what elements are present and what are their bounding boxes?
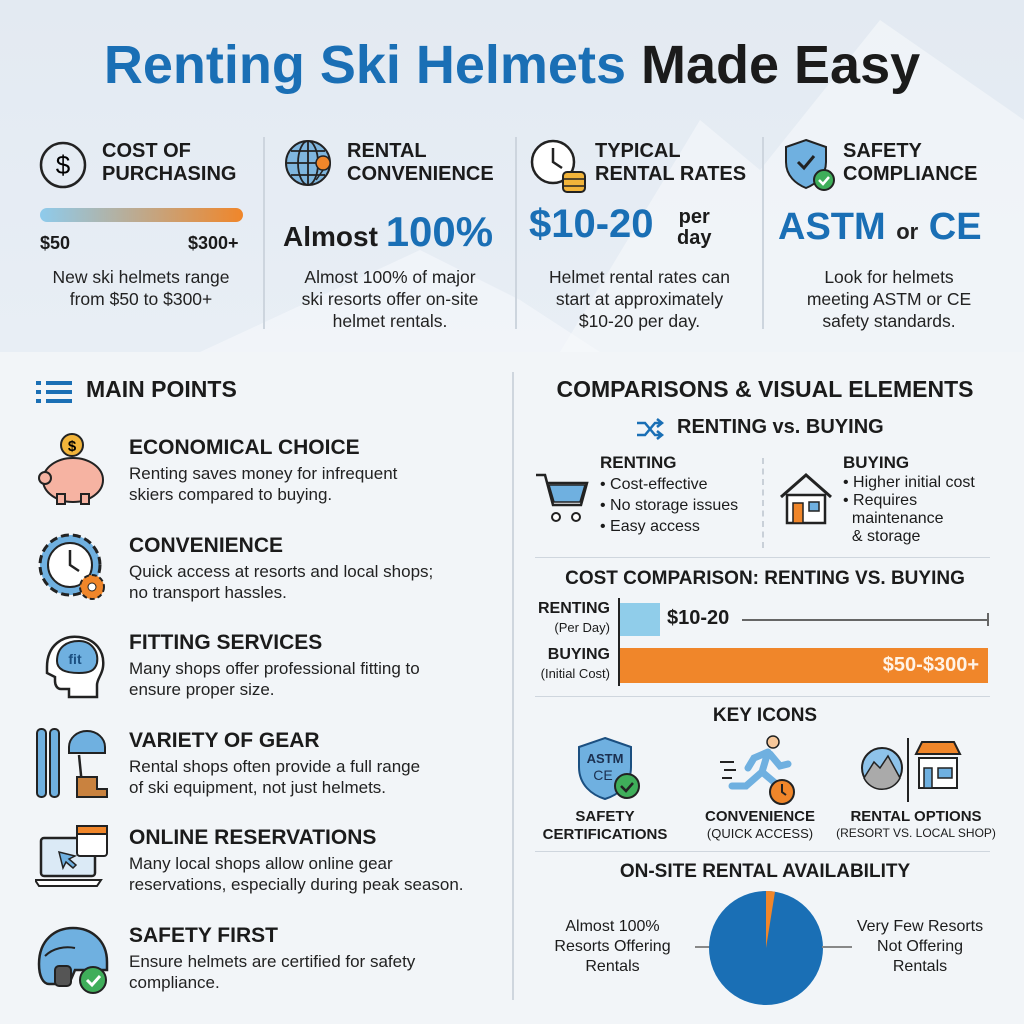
range bar <box>40 208 243 222</box>
renting column <box>536 453 738 535</box>
stat: typical rental rates <box>529 140 746 331</box>
subheading: renting vs buying: RENTING vs. BUYING <box>677 416 884 438</box>
icon: safety certifications: SAFETY <box>575 808 635 825</box>
stat: cost of purchasing: $300+ <box>188 233 239 253</box>
icon: convenience: CONVENIENCE <box>705 808 815 825</box>
item: fitting services: ensure proper size. <box>129 680 275 699</box>
item: economical choice <box>38 433 398 505</box>
bar chart: cost comparison: (Initial Cost) <box>541 666 610 681</box>
icon: safety certifications: CE <box>593 767 613 783</box>
panel: main points <box>35 376 464 994</box>
icon: safety certifications: ASTM <box>587 751 623 766</box>
stat: typical rental rates: TYPICAL <box>595 140 681 162</box>
stat: rental convenience: helmet rentals. <box>333 311 447 331</box>
stat: safety compliance: ASTM or CE <box>778 206 982 248</box>
pie chart: Rentals <box>585 958 640 975</box>
buying column: & storage <box>852 528 920 545</box>
item: online reservations: reservations, especially during peak season. <box>129 875 464 894</box>
stat: rental convenience <box>283 140 494 331</box>
item: fitting services: FITTING SERVICES <box>129 631 322 654</box>
buying column: • Requires <box>843 492 917 509</box>
icon: clock coins <box>530 140 586 193</box>
item: online reservations: Many local shops allow online gear <box>129 854 393 873</box>
item: variety of gear: Rental shops often provide a full range <box>129 757 420 776</box>
item: economical choice: skiers compared to buying. <box>129 485 332 504</box>
stat: cost of purchasing: from $50 to $300+ <box>70 289 212 309</box>
item: online reservations <box>35 825 464 894</box>
icon: convenience: (QUICK ACCESS) <box>707 826 813 841</box>
stat: safety compliance: Look for helmets <box>824 267 954 287</box>
pie chart: Rentals <box>893 958 947 975</box>
buying column <box>780 453 975 545</box>
stat: rental convenience: RENTAL <box>347 140 427 162</box>
heading: cost comparison: COST COMPARISON: RENTING VS. BUYING <box>565 568 965 589</box>
icon: safety certifications: CERTIFICATIONS <box>543 826 667 843</box>
item: variety of gear: VARIETY OF GEAR <box>129 729 320 752</box>
bar chart: cost comparison: RENTING <box>538 600 610 617</box>
icon: rental options: RENTAL OPTIONS <box>850 808 982 825</box>
bar chart: cost comparison: $10-20 <box>667 607 729 629</box>
item: economical choice: $ <box>68 438 77 455</box>
stat: typical rental rates: start at approximately <box>556 289 723 309</box>
stat: rental convenience: CONVENIENCE <box>347 163 494 185</box>
icon: shield <box>785 139 835 191</box>
stat: safety compliance: meeting ASTM or CE <box>807 289 971 309</box>
stat: typical rental rates: $10-20 <box>529 202 654 246</box>
icon: dollar <box>40 142 86 188</box>
pie chart: Not Offering <box>877 938 963 955</box>
icon: rental options <box>836 738 996 840</box>
stat: safety compliance: safety standards. <box>822 311 956 331</box>
stat: rental convenience: Almost 100% of major <box>304 267 476 287</box>
stat: safety compliance: COMPLIANCE <box>843 163 977 185</box>
item: safety first: Ensure helmets are certified for safety <box>129 952 415 971</box>
icon: globe <box>285 140 331 186</box>
stat: typical rental rates: $10-20 per day. <box>579 311 700 331</box>
pie chart: Resorts Offering <box>554 938 671 955</box>
pie chart <box>554 891 983 1005</box>
item: convenience: Quick access at resorts and local shops; <box>129 562 433 581</box>
decorative mountains <box>201 20 1024 352</box>
stat: cost of purchasing: PURCHASING <box>102 163 236 185</box>
bar chart: cost comparison <box>538 598 989 686</box>
item: economical choice: ECONOMICAL CHOICE <box>129 436 360 459</box>
item: convenience: no transport hassles. <box>129 583 287 602</box>
item: variety of gear <box>36 728 420 798</box>
renting column: • Easy access <box>600 518 700 535</box>
buying column: BUYING <box>843 453 909 472</box>
buying column: maintenance <box>852 510 944 527</box>
stat: cost of purchasing: $50 <box>40 233 70 253</box>
heading: comparisons: COMPARISONS & VISUAL ELEMENTS <box>556 376 974 402</box>
renting column: RENTING <box>600 453 676 472</box>
item: online reservations: ONLINE RESERVATIONS <box>129 826 376 849</box>
item: fitting services: Many shops offer professional fitting to <box>129 659 420 678</box>
icon: rental options: (RESORT VS. LOCAL SHOP) <box>836 826 996 840</box>
title: Renting Ski Helmets Made Easy <box>104 35 920 95</box>
top band background <box>0 0 1024 352</box>
stat: safety compliance: SAFETY <box>843 140 922 162</box>
icon: dollar: $ <box>56 150 71 180</box>
pie chart: Very Few Resorts <box>857 918 983 935</box>
stat: cost of purchasing <box>40 140 243 309</box>
icon: safety certifications <box>543 737 667 843</box>
item: convenience: CONVENIENCE <box>129 534 283 557</box>
item: safety first <box>38 924 416 994</box>
stat: typical rental rates: RENTAL RATES <box>595 163 746 185</box>
bar chart: cost comparison: BUYING <box>548 646 610 663</box>
stat: typical rental rates: per <box>679 206 710 228</box>
panel: comparisons <box>535 376 996 1005</box>
bar chart: cost comparison: $50-$300+ <box>883 654 979 676</box>
renting column: • No storage issues <box>600 497 738 514</box>
stat: rental convenience: ski resorts offer on-site <box>302 289 478 309</box>
renting column: • Cost-effective <box>600 476 708 493</box>
bar chart: cost comparison: (Per Day) <box>554 620 610 635</box>
item: safety first: SAFETY FIRST <box>129 924 278 947</box>
item: convenience <box>38 534 433 602</box>
pie chart: Almost 100% <box>565 918 660 935</box>
icon: convenience <box>705 735 815 841</box>
item: fitting services: fit <box>68 651 82 667</box>
stat: typical rental rates: day <box>677 227 711 249</box>
stat: cost of purchasing: COST OF <box>102 140 191 162</box>
buying column: • Higher initial cost <box>843 474 975 491</box>
heading: on-site rental availability: ON-SITE RENTAL AVAILABILITY <box>620 861 910 882</box>
item: fitting services <box>46 631 420 699</box>
item: safety first: compliance. <box>129 973 220 992</box>
heading: main points: MAIN POINTS <box>86 376 237 402</box>
item: economical choice: Renting saves money for infrequent <box>129 464 397 483</box>
stat: typical rental rates: Helmet rental rates can <box>549 267 730 287</box>
heading: key icons: KEY ICONS <box>713 705 817 726</box>
item: variety of gear: of ski equipment, not just helmets. <box>129 778 386 797</box>
stat: rental convenience: Almost 100% <box>283 208 493 255</box>
stat: cost of purchasing: New ski helmets range <box>52 267 230 287</box>
stat: safety compliance <box>778 139 982 331</box>
